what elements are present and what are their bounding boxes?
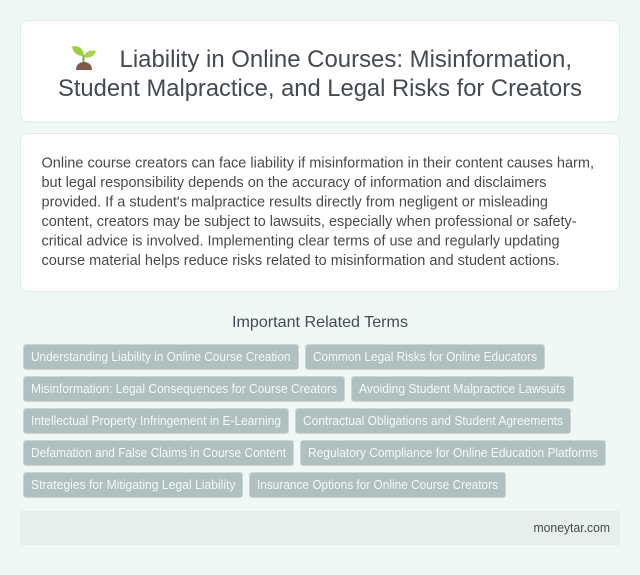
- title: [58, 46, 582, 102]
- title: Student Malpractice, and Legal Risks for Creators: [58, 75, 582, 102]
- heading: related terms: Important Related Terms: [232, 314, 408, 331]
- tag: Insurance Options for Online Course Creators: [257, 478, 498, 492]
- tag: [352, 376, 574, 402]
- tag: [306, 344, 544, 370]
- summary paragraph: provided. If a student's malpractice results directly from negligent or misleading: [42, 194, 548, 210]
- summary paragraph: critical advice is involved. Implementing clear terms of use and regularly updating: [42, 234, 560, 250]
- tag: Strategies for Mitigating Legal Liability: [31, 478, 236, 492]
- footer: moneytar.com: [534, 521, 610, 535]
- tag: Contractual Obligations and Student Agreements: [303, 414, 563, 428]
- tag: [250, 472, 506, 498]
- tag: [24, 408, 288, 434]
- tag: Intellectual Property Infringement in E-Learning: [31, 414, 281, 428]
- tag: [296, 408, 570, 434]
- summary paragraph: [42, 156, 594, 269]
- tag: [300, 440, 606, 466]
- panel: summary text: [20, 134, 620, 292]
- footer: [20, 511, 620, 545]
- summary paragraph: Online course creators can face liability if misinformation in their content causes harm,: [42, 156, 594, 172]
- tag: Misinformation: Legal Consequences for Course Creators: [31, 382, 337, 396]
- tag: Regulatory Compliance for Online Education Platforms: [308, 446, 598, 460]
- title: Liability in Online Courses: Misinformation,: [120, 46, 572, 73]
- summary paragraph: course material helps reduce risks related to misinformation and student actions.: [42, 253, 560, 269]
- tag: [24, 472, 242, 498]
- tag: Avoiding Student Malpractice Lawsuits: [359, 382, 566, 396]
- summary paragraph: content, creators may be subject to lawsuits, especially when professional or safety-: [42, 214, 577, 230]
- panel: title header: [20, 20, 620, 122]
- tag: [24, 376, 344, 402]
- tag: Defamation and False Claims in Course Content: [31, 446, 286, 460]
- tag: [24, 440, 294, 466]
- tag: Common Legal Risks for Online Educators: [313, 350, 537, 364]
- tag: Understanding Liability in Online Course Creation: [31, 350, 290, 364]
- tag list: [24, 344, 606, 498]
- icon: seedling: [72, 46, 96, 70]
- tag: [24, 344, 298, 370]
- summary paragraph: but legal responsibility depends on the accuracy of information and disclaimers: [42, 175, 546, 191]
